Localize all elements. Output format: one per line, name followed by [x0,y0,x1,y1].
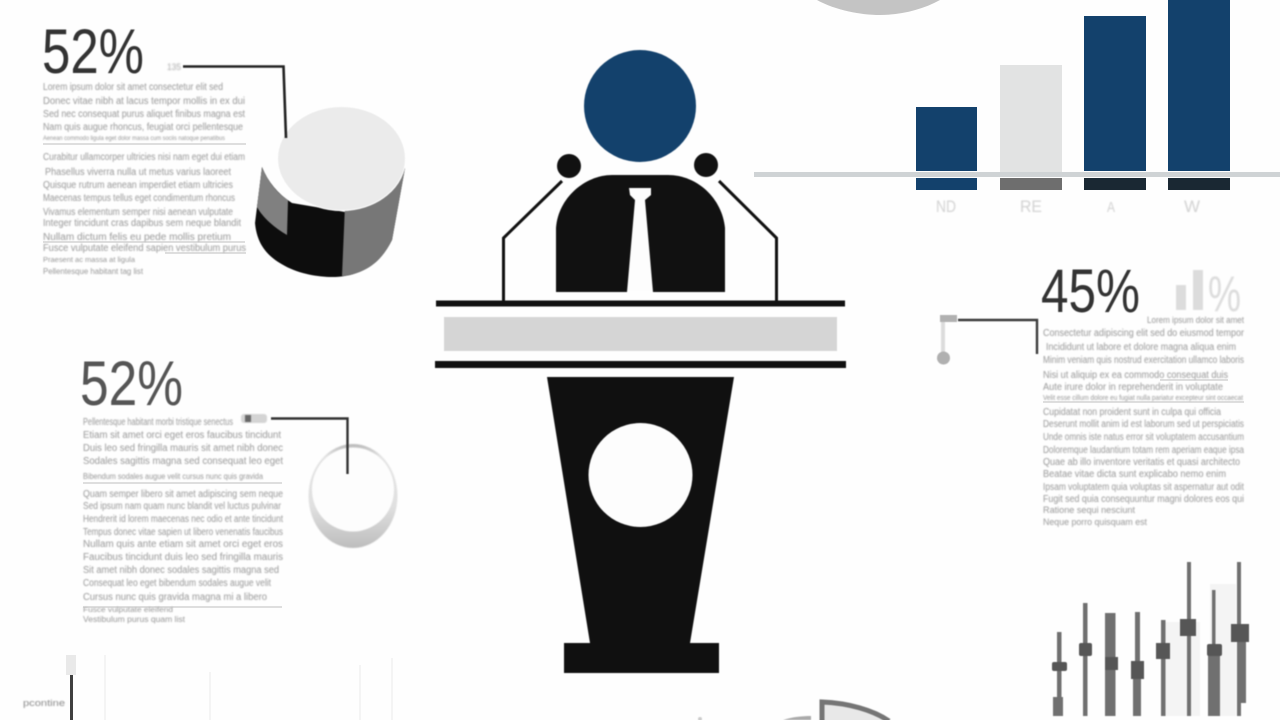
text block: right description: Ipsam voluptatem quia voluptas sit aspernatur aut odit [1043,482,1244,493]
callout line [183,66,286,138]
chart: lower-right candlestick bars [1052,562,1249,716]
text block: right description: Aute irure dolor in reprehenderit in voluptate [1043,382,1223,393]
fragment label: pcontine [23,698,65,708]
chart: 3D cylinder with callout [167,62,406,277]
stat number: 45%: 45% [1041,257,1140,325]
text block: top-left description: Phasellus viverra nulla ut metus varius laoreet [45,167,231,178]
text block: top-left description: Pellentesque habitant tag list [43,267,144,276]
text block: top-left description: Vivamus elementum semper nisi aenean vulputate [43,207,233,218]
text block: right description: Lorem ipsum dolor sit amet [1147,315,1244,325]
panel: left-middle statistic [80,349,283,624]
text block: top-left description: Curabitur ullamcorper ultricies nisi nam eget dui etiam [43,152,245,163]
callout tag: 135 [167,62,181,72]
dark bar [70,675,73,720]
callout: right statistic connector [937,315,1037,364]
figure: speaker at podium [435,50,846,673]
text block: right description: Quae ab illo inventore veritatis et quasi architecto [1043,457,1240,468]
callout line [271,418,348,474]
text block: right description: Nisi ut aliquip ex ea commodo consequat duis [1043,370,1228,381]
text block: left-middle description: Faucibus tincidunt duis leo sed fringilla mauris [83,552,283,563]
chart: faded bottom-left fragment [23,655,392,720]
speaker torso [556,175,725,292]
text block: left-middle description: Tempus donec vitae sapien ut libero venenatis faucibus [83,527,283,538]
text block: top-left description [43,82,246,276]
text block: right description: Neque porro quisquam est [1043,517,1147,527]
connector line [958,320,1037,354]
podium lower line [435,361,846,368]
stat number: 52%: 52% [80,349,183,419]
podium emblem [588,423,692,527]
text block: right description: Fugit sed quia consequuntur magni dolores eos qui [1043,494,1244,505]
text block: left-middle description: Consequat leo eget bibendum sodales augue velit [83,578,271,589]
text block: right description: Consectetur adipiscing elit sed do eiusmod tempor [1043,328,1245,339]
text block: left-middle description: Hendrerit id lorem maecenas nec odio et ante tincidunt [83,514,283,525]
chart: pie fragment at bottom edge [698,702,889,720]
bar 1 [916,107,977,190]
axis labels: RE [1020,197,1042,216]
text block: left-middle description: Etiam sit amet orci eget eros faucibus tincidunt [83,430,281,441]
text block: left-middle description: Sed ipsum nam quam nunc blandit vel luctus pulvinar [83,501,282,512]
text block: right description: Beatae vitae dicta sunt explicabo nemo enim [1043,469,1226,480]
text block: left-middle description: Sodales sagittis magna sed consequat leo eget [83,456,283,467]
text block: left-middle description: Quam semper libero sit amet adipiscing sem neque [83,489,283,500]
outlined wedge [822,702,889,720]
text block: top-left description: Nullam dictum felis eu pede mollis pretium [43,232,231,243]
text block: top-left description: Integer tincidunt cras dapibus sem neque blandit [43,218,241,229]
text block: top-left description: Praesent ac massa at ligula [43,257,135,264]
text block: left-middle description: Duis leo sed fringilla mauris sit amet nibh donec [83,443,283,454]
ring shadow [308,444,398,548]
axis labels [936,197,1200,216]
ring face [312,448,394,532]
ghost bars and percent sign [1176,266,1241,322]
text block: top-left description: Sed nec consequat purus aliquet finibus magna est [43,109,245,120]
podium stand [547,377,734,673]
grey wedge [783,716,811,720]
bar 4 [1168,0,1230,190]
callout tag [241,414,267,423]
podium top line [436,300,845,306]
text block: left-middle description: Sit amet nibh donec sodales sagittis magna sed [83,565,279,576]
microphone stands [504,181,776,302]
panel: top-left statistic [42,17,246,276]
text block: right description: Deserunt mollit anim id est laborum sed ut perspiciatis [1043,419,1244,430]
text block: right description: Cupidatat non proident sunt in culpa qui officia [1043,407,1221,418]
connector bulb icon [937,315,957,364]
grey semicircle at top edge [817,0,940,15]
text block: left-middle description: Pellentesque habitant morbi tristique senectus [83,417,233,428]
text block: right description: Incididunt ut labore et dolore magna aliqua enim [1046,342,1236,353]
podium grey band [444,317,837,351]
chart: ring with callout [241,414,398,548]
axis line [754,172,1280,177]
text block: left-middle description: Vestibulum purus quam list [83,615,186,624]
text block: top-left description: Aenean commodo ligula eget dolor massa cum sociis natoque penatibus [43,136,225,142]
faint background bars [1164,584,1236,716]
text block: top-left description: Nam quis augue rhoncus, feugiat orci pellentesque [43,122,243,133]
stat number: 52%: 52% [42,17,144,87]
text block: right description: Ratione sequi nesciunt [1043,505,1136,515]
text block: top-left description: Fusce vulputate eleifend sapien vestibulum purus [43,243,246,254]
bar 2 [1000,65,1062,190]
text block: right description: Velit esse cillum dolore eu fugiat nulla pariatur excepteur sint occaecat [1043,395,1243,402]
speaker head [584,50,696,162]
cylinder top [278,106,406,210]
text block: left-middle description: Nullam quis ante etiam sit amet orci eget eros [83,539,283,550]
text block: top-left description: Lorem ipsum dolor sit amet consectetur elit sed [43,82,223,93]
axis labels: W [1184,197,1200,216]
chart: top-right bar chart [754,0,1280,216]
text block: left-middle description: Fusce vulputate eleifend [83,607,173,614]
necktie [627,188,653,292]
panel: right statistic [1041,257,1245,527]
light cap [66,655,76,675]
cylinder body [255,167,405,277]
axis labels: ND [936,197,956,216]
text block: top-left description: Donec vitae nibh at lacus tempor mollis in ex dui [43,96,245,107]
text block: right description [1043,315,1245,527]
bar 3 [1084,16,1146,190]
text block: left-middle description: Bibendum sodales augue velit cursus nunc quis gravida [83,472,264,481]
handles [1052,619,1249,679]
ghost bars and percent sign: % [1208,266,1241,322]
axis labels: A [1107,199,1115,216]
text block: right description: Minim veniam quis nostrud exercitation ullamco laboris [1043,355,1244,366]
stems [1053,562,1246,716]
text block: top-left description: Maecenas tempus tellus eget condimentum rhoncus [43,193,235,204]
text block: top-left description: Quisque rutrum aenean imperdiet etiam ultricies [43,180,233,191]
text block: left-middle description [83,417,283,624]
microphone heads [557,153,718,178]
small marker [698,717,702,720]
text block: left-middle description: Cursus nunc quis gravida magna mi a libero [83,592,267,603]
